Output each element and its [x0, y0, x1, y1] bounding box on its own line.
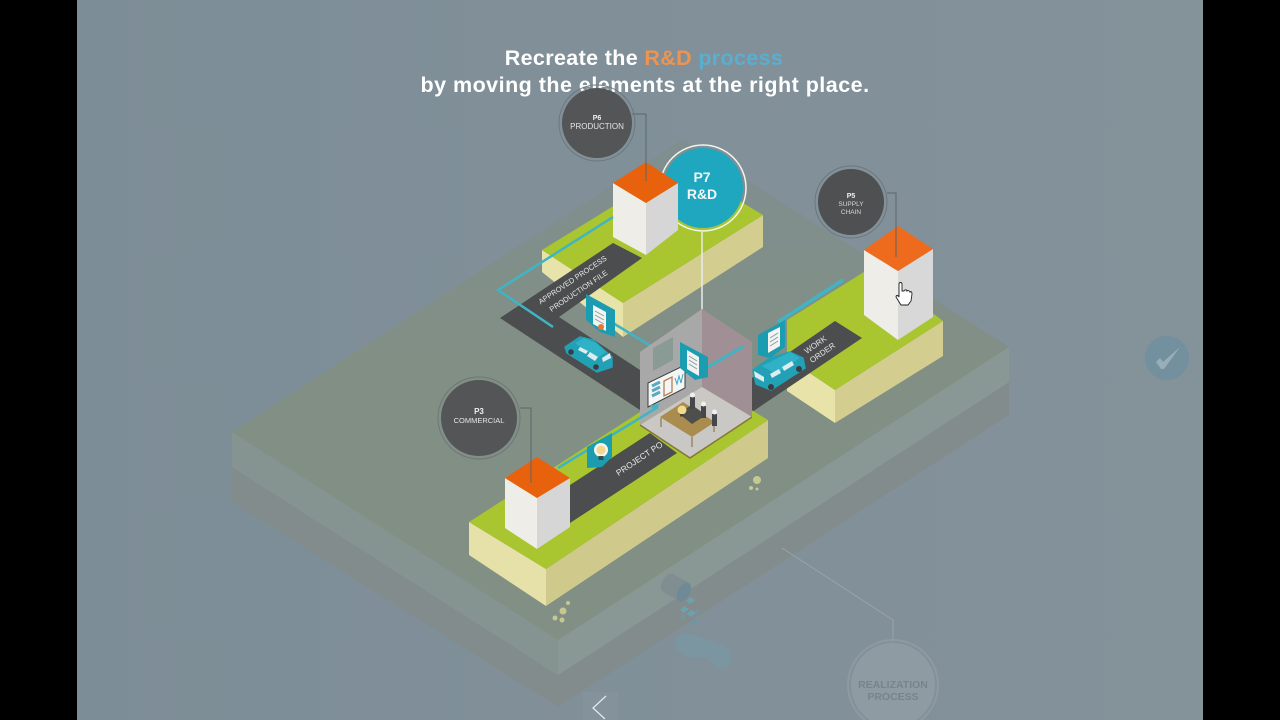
marker: room document	[680, 342, 708, 380]
road: project PO	[570, 433, 677, 523]
P7 R&D circle	[660, 145, 746, 231]
P5 supply chain circle: SUPPLY	[838, 201, 864, 208]
room floor	[640, 387, 752, 457]
confirm check button	[1145, 336, 1189, 380]
floor front edge	[640, 417, 752, 458]
process line: P6 to R&D	[498, 217, 613, 327]
realization process circle: REALIZATION	[858, 679, 928, 691]
P5 supply chain circle: P5	[847, 193, 855, 200]
dots near P3 block	[552, 601, 570, 622]
block: P5 supply chain	[787, 267, 943, 423]
spilled barrel and droplets	[658, 571, 700, 625]
instruction heading: by moving the elements at the right place.	[420, 73, 870, 97]
marker: project idea lightbulb	[587, 433, 612, 468]
P7 R&D circle: R&D	[687, 186, 717, 202]
instruction heading	[420, 46, 870, 97]
P6 production circle: PRODUCTION	[570, 122, 624, 131]
road: work order	[752, 321, 862, 412]
P3 commercial circle: COMMERCIAL	[454, 416, 504, 425]
room left wall	[640, 309, 702, 425]
process line: document to room	[613, 323, 677, 362]
process line: room to P5	[708, 346, 744, 367]
road label: work: WORK	[803, 334, 829, 356]
P6 production circle	[559, 85, 635, 161]
P5 supply chain circle: CHAIN	[841, 209, 861, 216]
road label: project PO: PROJECT PO	[614, 439, 665, 478]
water puddle	[675, 634, 731, 669]
block: P6 production	[542, 165, 763, 337]
whiteboard	[648, 365, 685, 407]
arrow head: P3 line	[650, 404, 660, 411]
realization process circle	[848, 640, 938, 720]
process line: P3 to room	[558, 407, 658, 468]
room right wall	[702, 309, 752, 417]
link to P7 room	[701, 232, 703, 312]
connector: P5 to building	[887, 193, 896, 257]
connector to realization process	[782, 548, 893, 642]
hand cursor	[896, 282, 912, 305]
connector: P6 to building	[632, 114, 646, 181]
instruction heading: Recreate the R&D process	[505, 46, 783, 70]
dots near room block	[749, 476, 761, 490]
R&D room	[640, 309, 752, 458]
realization process circle: PROCESS	[867, 691, 919, 703]
building: P3 commercial	[505, 457, 570, 549]
P5 supply chain circle	[815, 166, 887, 238]
P7 R&D circle: P7	[693, 169, 711, 185]
block: P3 commercial	[469, 380, 768, 606]
marker: approved document	[586, 294, 615, 337]
room window	[653, 337, 673, 371]
P3 commercial circle: P3	[474, 407, 484, 416]
road label: approved process: APPROVED PROCESS	[537, 254, 608, 306]
road label: production file: PRODUCTION FILE	[548, 268, 609, 314]
building: P5 supply chain	[864, 226, 933, 340]
road: approved process production file	[500, 243, 642, 410]
car on production road	[565, 337, 612, 372]
P3 commercial circle	[438, 377, 520, 459]
road label: order: ORDER	[808, 341, 837, 365]
P6 production circle: P6	[593, 115, 601, 122]
connector: P3 to building	[520, 408, 531, 483]
meeting table	[660, 402, 715, 447]
building: P6 production	[613, 162, 678, 255]
car on work order road	[753, 352, 805, 390]
marker: work order document	[758, 320, 785, 358]
lightbulb on table	[678, 406, 686, 416]
base platform	[232, 139, 1009, 707]
team of people	[690, 392, 717, 426]
process line: P5 to room	[778, 280, 843, 322]
back arrow button	[583, 692, 618, 720]
